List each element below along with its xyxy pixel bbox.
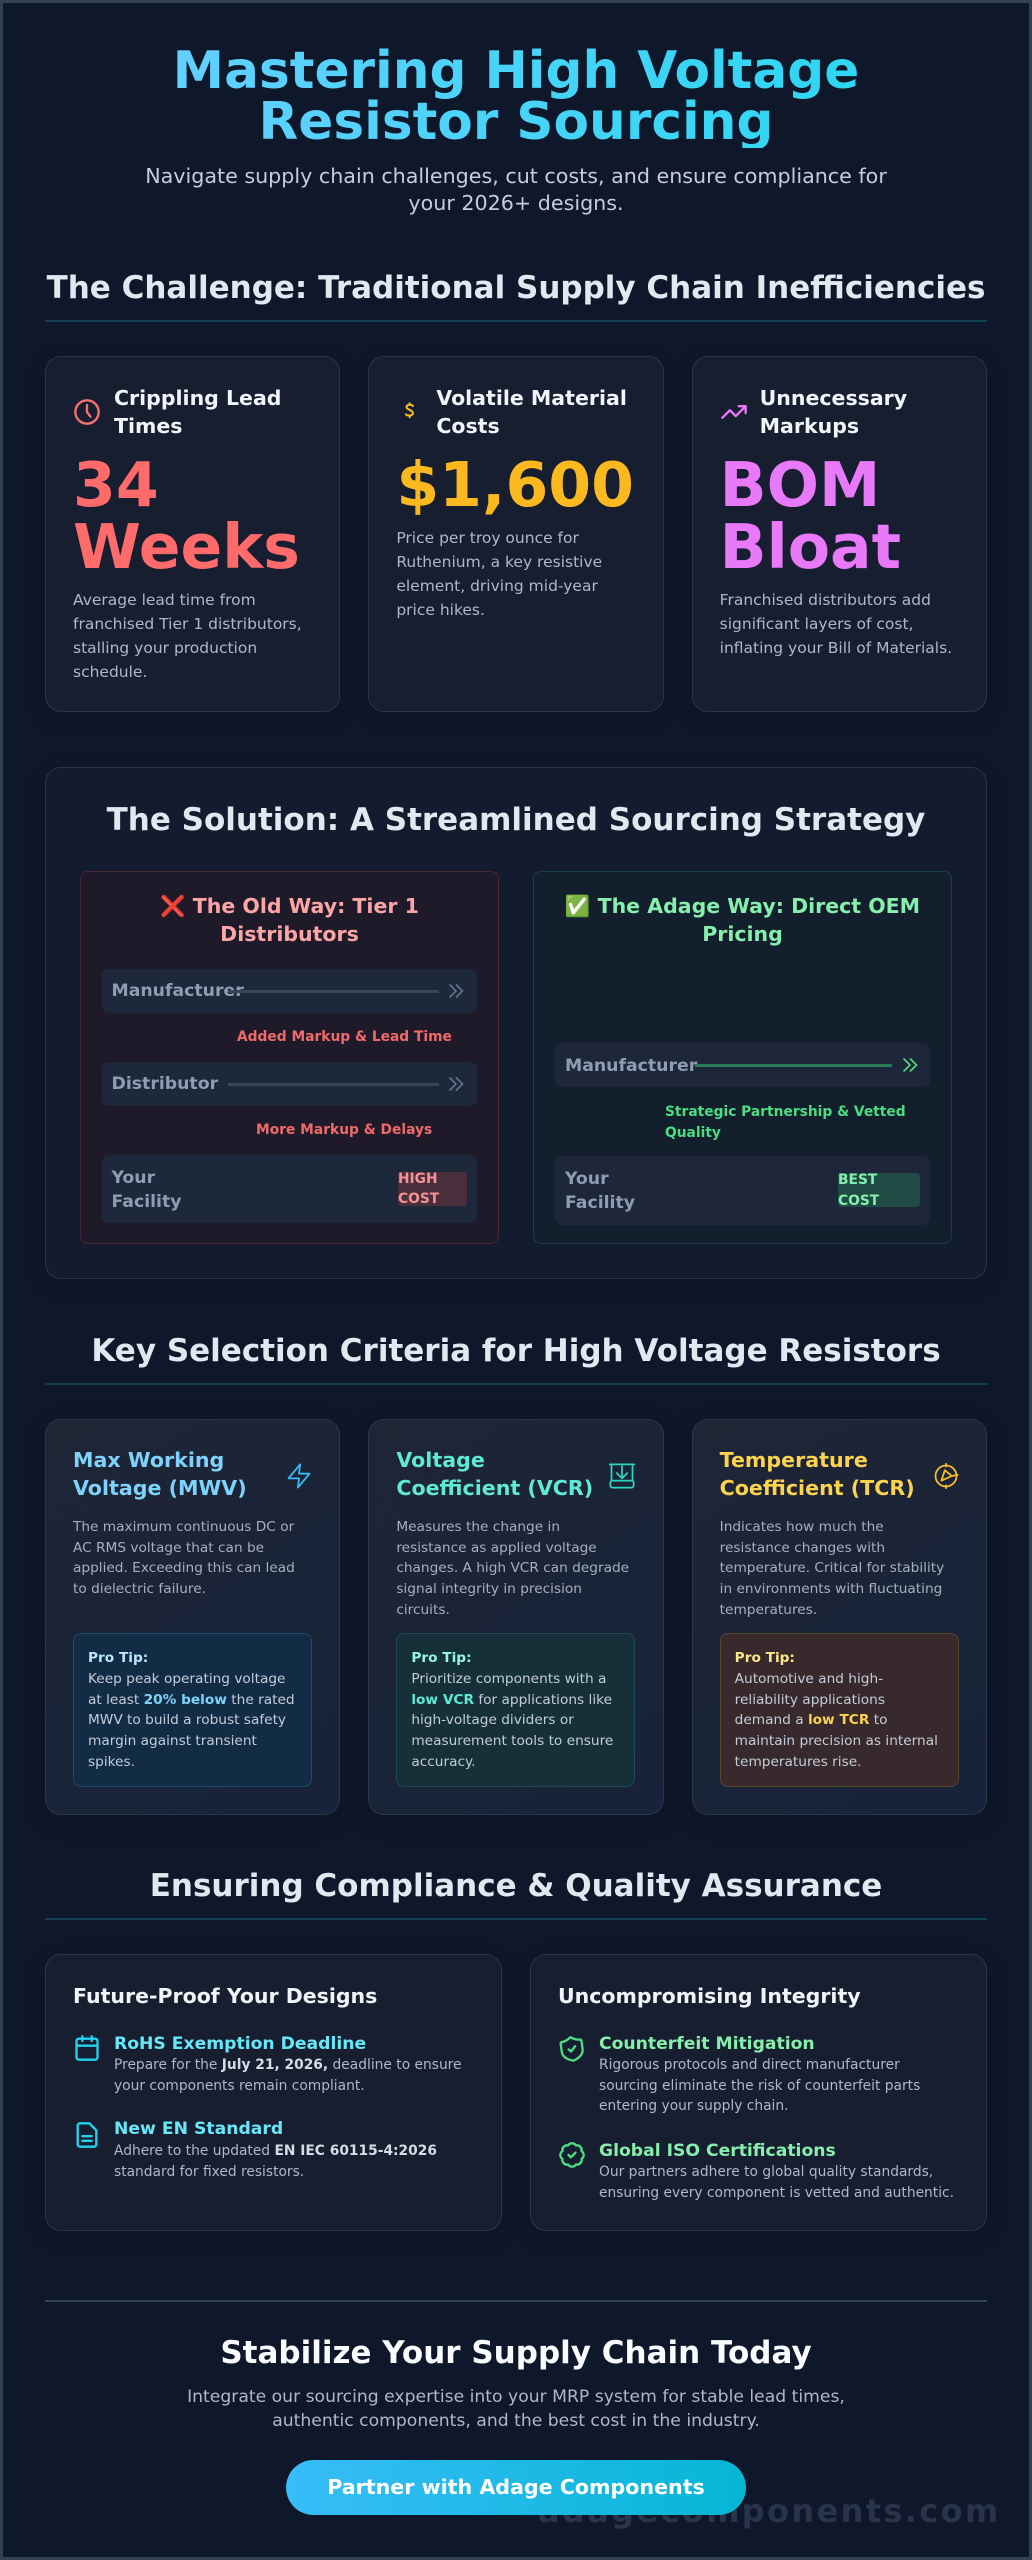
description: significant layers of cost, bbox=[720, 615, 913, 633]
flow step: manufacturer: Manufacturer bbox=[112, 981, 244, 1001]
description bbox=[720, 591, 952, 657]
call to action text: Integrate our sourcing expertise into your MRP system for stable lead times, bbox=[187, 2387, 845, 2407]
flow step: manufacturer bbox=[102, 969, 477, 1013]
item text bbox=[114, 2057, 462, 2094]
description: Ruthenium, a key resistive bbox=[396, 553, 602, 571]
description: inflating your Bill of Materials. bbox=[720, 639, 952, 657]
old way heading: Distributors bbox=[220, 922, 359, 946]
stat: BOM bloat bbox=[720, 449, 901, 583]
description bbox=[720, 1519, 944, 1618]
description bbox=[396, 1519, 629, 1618]
annotation: strategic partnership: Strategic Partnership & Vetted bbox=[665, 1104, 906, 1120]
panel: voltage coefficient bbox=[368, 1419, 664, 1815]
pro tip: Automotive and high- bbox=[735, 1671, 883, 1687]
panel: unnecessary markups bbox=[692, 356, 987, 712]
description: Indicates how much the bbox=[720, 1519, 884, 1535]
call to action text bbox=[187, 2387, 845, 2431]
pro tip: maintain precision as internal bbox=[735, 1733, 938, 1749]
description bbox=[73, 591, 302, 681]
icon: document bbox=[76, 2122, 98, 2148]
flow step: your facility, best cost: Facility bbox=[565, 1193, 635, 1213]
heading: the solution: The Solution: A Streamlined Sourcing Strategy bbox=[107, 802, 925, 838]
card heading bbox=[436, 386, 627, 438]
description: temperatures. bbox=[720, 1602, 817, 1618]
pro tip bbox=[396, 1633, 635, 1787]
pro tip: low VCR for applications like bbox=[411, 1692, 612, 1708]
flow step: your facility, high cost bbox=[102, 1155, 477, 1223]
icon: badge check bbox=[559, 2142, 585, 2168]
description: resistance changes with bbox=[720, 1540, 885, 1556]
item text: your components remain compliant. bbox=[114, 2078, 365, 2094]
call to action text: authentic components, and the best cost in the industry. bbox=[272, 2411, 760, 2431]
card heading: Unnecessary bbox=[760, 386, 907, 410]
panel: future-proof your designs bbox=[45, 1954, 502, 2231]
card heading bbox=[720, 1448, 915, 1500]
description: franchised Tier 1 distributors, bbox=[73, 615, 302, 633]
item title: RoHS Exemption Deadline bbox=[114, 2034, 366, 2054]
title: Resistor Sourcing bbox=[258, 92, 773, 152]
icon: voltage coefficient bbox=[608, 1464, 636, 1488]
icon: dollar bbox=[404, 402, 414, 418]
description: applied. Exceeding this can lead bbox=[73, 1560, 295, 1576]
item text: standard for fixed resistors. bbox=[114, 2164, 304, 2180]
adage way heading: Pricing bbox=[702, 922, 783, 946]
flow step: your facility, best cost: COST bbox=[838, 1193, 879, 1209]
description: price hikes. bbox=[396, 601, 485, 619]
card heading: Volatile Material bbox=[436, 386, 627, 410]
heading: compliance and quality: Ensuring Compliance & Quality Assurance bbox=[150, 1868, 882, 1904]
card heading: Coefficient (VCR) bbox=[396, 1476, 593, 1500]
flow step: manufacturer bbox=[555, 1043, 930, 1087]
icon: trending up bbox=[721, 404, 747, 420]
description: Franchised distributors add bbox=[720, 591, 931, 609]
pro tip: Pro Tip: bbox=[88, 1650, 148, 1666]
pro tip: Pro Tip: bbox=[411, 1650, 472, 1666]
description: stalling your production bbox=[73, 639, 257, 657]
item text: sourcing eliminate the risk of counterfeit parts bbox=[599, 2078, 920, 2094]
panel: volatile material costs bbox=[368, 356, 664, 712]
icon: shield check bbox=[560, 2036, 584, 2062]
icon: calendar bbox=[75, 2035, 99, 2061]
title bbox=[170, 46, 862, 148]
card heading: Temperature bbox=[720, 1448, 868, 1472]
pro tip: accuracy. bbox=[411, 1754, 475, 1770]
item text: ensuring every component is vetted and authentic. bbox=[599, 2185, 954, 2201]
icon: temperature coefficient bbox=[934, 1462, 958, 1490]
stat: 34 weeks: Weeks bbox=[73, 511, 300, 583]
description: AC RMS voltage that can be bbox=[73, 1540, 264, 1556]
pro tip: reliability applications bbox=[735, 1692, 885, 1708]
description: signal integrity in precision bbox=[396, 1581, 582, 1597]
panel heading: Future-Proof Your Designs bbox=[73, 1984, 377, 2008]
item text bbox=[599, 2164, 954, 2201]
item title: Global ISO Certifications bbox=[599, 2141, 836, 2161]
panel: crippling lead times bbox=[45, 356, 340, 712]
stat: 34 weeks: 34 bbox=[73, 449, 159, 521]
item text: Adhere to the updated EN IEC 60115-4:2026 bbox=[114, 2143, 437, 2159]
pro tip bbox=[720, 1633, 959, 1787]
description: temperature. Critical for stability bbox=[720, 1560, 944, 1576]
pro tip: margin against transient bbox=[88, 1733, 257, 1749]
icon: lightning bbox=[288, 1464, 310, 1488]
button bbox=[286, 2460, 746, 2515]
heading: key selection criteria: Key Selection Criteria for High Voltage Resistors bbox=[91, 1333, 941, 1369]
card heading: Crippling Lead bbox=[114, 386, 281, 410]
flow step: your facility, high cost: Your bbox=[112, 1168, 155, 1188]
card heading: Costs bbox=[436, 414, 500, 438]
flow step: your facility, best cost: BEST bbox=[838, 1172, 877, 1188]
pro tip: measurement tools to ensure bbox=[411, 1733, 613, 1749]
stat: $1,600: $1,600 bbox=[396, 449, 634, 521]
flow step: distributor bbox=[102, 1062, 477, 1106]
description: in environments with fluctuating bbox=[720, 1581, 942, 1597]
card heading: Voltage (MWV) bbox=[73, 1476, 247, 1500]
card heading: Coefficient (TCR) bbox=[720, 1476, 915, 1500]
item text: entering your supply chain. bbox=[599, 2098, 789, 2114]
card heading: Voltage bbox=[396, 1448, 485, 1472]
watermark: adagecomponents.com bbox=[538, 2492, 1001, 2530]
description bbox=[396, 529, 602, 619]
description: to dielectric failure. bbox=[73, 1581, 206, 1597]
card heading: Times bbox=[114, 414, 182, 438]
title: Mastering High Voltage bbox=[173, 40, 859, 100]
button: Partner with Adage Components bbox=[327, 2475, 705, 2499]
pro tip: high-voltage dividers or bbox=[411, 1712, 574, 1728]
heading: call to action: Stabilize Your Supply Chain Today bbox=[220, 2335, 812, 2371]
pro tip: Pro Tip: bbox=[735, 1650, 795, 1666]
adage way heading bbox=[565, 894, 920, 946]
description: schedule. bbox=[73, 663, 147, 681]
stat: 34 weeks bbox=[73, 449, 300, 583]
flow step: distributor: Distributor bbox=[112, 1074, 218, 1094]
description: Price per troy ounce for bbox=[396, 529, 579, 547]
description: element, driving mid-year bbox=[396, 577, 598, 595]
card heading bbox=[73, 1448, 247, 1500]
annotation: strategic partnership: Quality bbox=[665, 1125, 721, 1141]
annotation: added markup: Added Markup & Lead Time bbox=[237, 1029, 452, 1045]
flow step: your facility, best cost bbox=[555, 1156, 930, 1225]
subtitle: Navigate supply chain challenges, cut costs, and ensure compliance for bbox=[145, 164, 887, 188]
panel heading: Uncompromising Integrity bbox=[558, 1984, 861, 2008]
subtitle: your 2026+ designs. bbox=[408, 190, 624, 214]
description: resistance as applied voltage bbox=[396, 1540, 597, 1556]
flow step: manufacturer: Manufacturer bbox=[565, 1056, 697, 1076]
heading: the challenge: The Challenge: Traditional Supply Chain Inefficiencies bbox=[47, 270, 985, 306]
icon: clock bbox=[74, 399, 100, 425]
annotation: strategic partnership bbox=[665, 1104, 906, 1141]
pro tip: MWV to build a robust safety bbox=[88, 1712, 286, 1728]
pro tip: at least 20% below the rated bbox=[88, 1692, 295, 1708]
item text: Prepare for the July 21, 2026, deadline to ensure bbox=[114, 2057, 462, 2073]
old way heading bbox=[160, 894, 419, 946]
subtitle bbox=[145, 164, 887, 214]
pro tip bbox=[73, 1633, 312, 1787]
panel: the old way bbox=[80, 871, 499, 1244]
card heading: Markups bbox=[760, 414, 859, 438]
item title: New EN Standard bbox=[114, 2119, 283, 2139]
flow step: your facility, best cost: Your bbox=[565, 1169, 609, 1189]
panel: the solution bbox=[45, 767, 987, 1279]
card heading bbox=[760, 386, 907, 438]
description: circuits. bbox=[396, 1602, 450, 1618]
old way heading: ❌ The Old Way: Tier 1 bbox=[160, 894, 419, 918]
item text bbox=[114, 2143, 437, 2180]
flow step: your facility, high cost: COST bbox=[398, 1191, 439, 1207]
panel: the adage way bbox=[533, 871, 952, 1244]
panel: max working voltage bbox=[45, 1419, 340, 1815]
description bbox=[72, 1519, 295, 1597]
panel: temperature coefficient bbox=[692, 1419, 987, 1815]
adage way heading: ✅ The Adage Way: Direct OEM bbox=[565, 894, 920, 918]
stat: BOM bloat: BOM bbox=[720, 449, 880, 521]
annotation: more markup: More Markup & Delays bbox=[256, 1122, 432, 1138]
card heading bbox=[114, 386, 281, 438]
item title: Counterfeit Mitigation bbox=[599, 2034, 815, 2054]
item text: Rigorous protocols and direct manufacturer bbox=[599, 2057, 900, 2073]
panel: uncompromising integrity bbox=[530, 1954, 987, 2231]
description: changes. A high VCR can degrade bbox=[396, 1560, 629, 1576]
flow step: your facility, high cost: Facility bbox=[112, 1192, 182, 1212]
pro tip: demand a low TCR to bbox=[735, 1712, 887, 1728]
flow step: your facility, high cost: HIGH bbox=[398, 1170, 438, 1186]
description: Average lead time from bbox=[73, 591, 256, 609]
stat: BOM bloat: Bloat bbox=[720, 511, 901, 583]
description: The maximum continuous DC or bbox=[73, 1519, 294, 1535]
pro tip: Keep peak operating voltage bbox=[88, 1671, 285, 1687]
item text: Our partners adhere to global quality standards, bbox=[599, 2164, 933, 2180]
item text bbox=[599, 2057, 920, 2114]
card heading: Max Working bbox=[73, 1448, 224, 1472]
card heading bbox=[396, 1448, 593, 1500]
pro tip: Prioritize components with a bbox=[411, 1671, 606, 1687]
pro tip: spikes. bbox=[88, 1754, 135, 1770]
description: Measures the change in bbox=[396, 1519, 560, 1535]
pro tip: temperatures rise. bbox=[735, 1754, 862, 1770]
